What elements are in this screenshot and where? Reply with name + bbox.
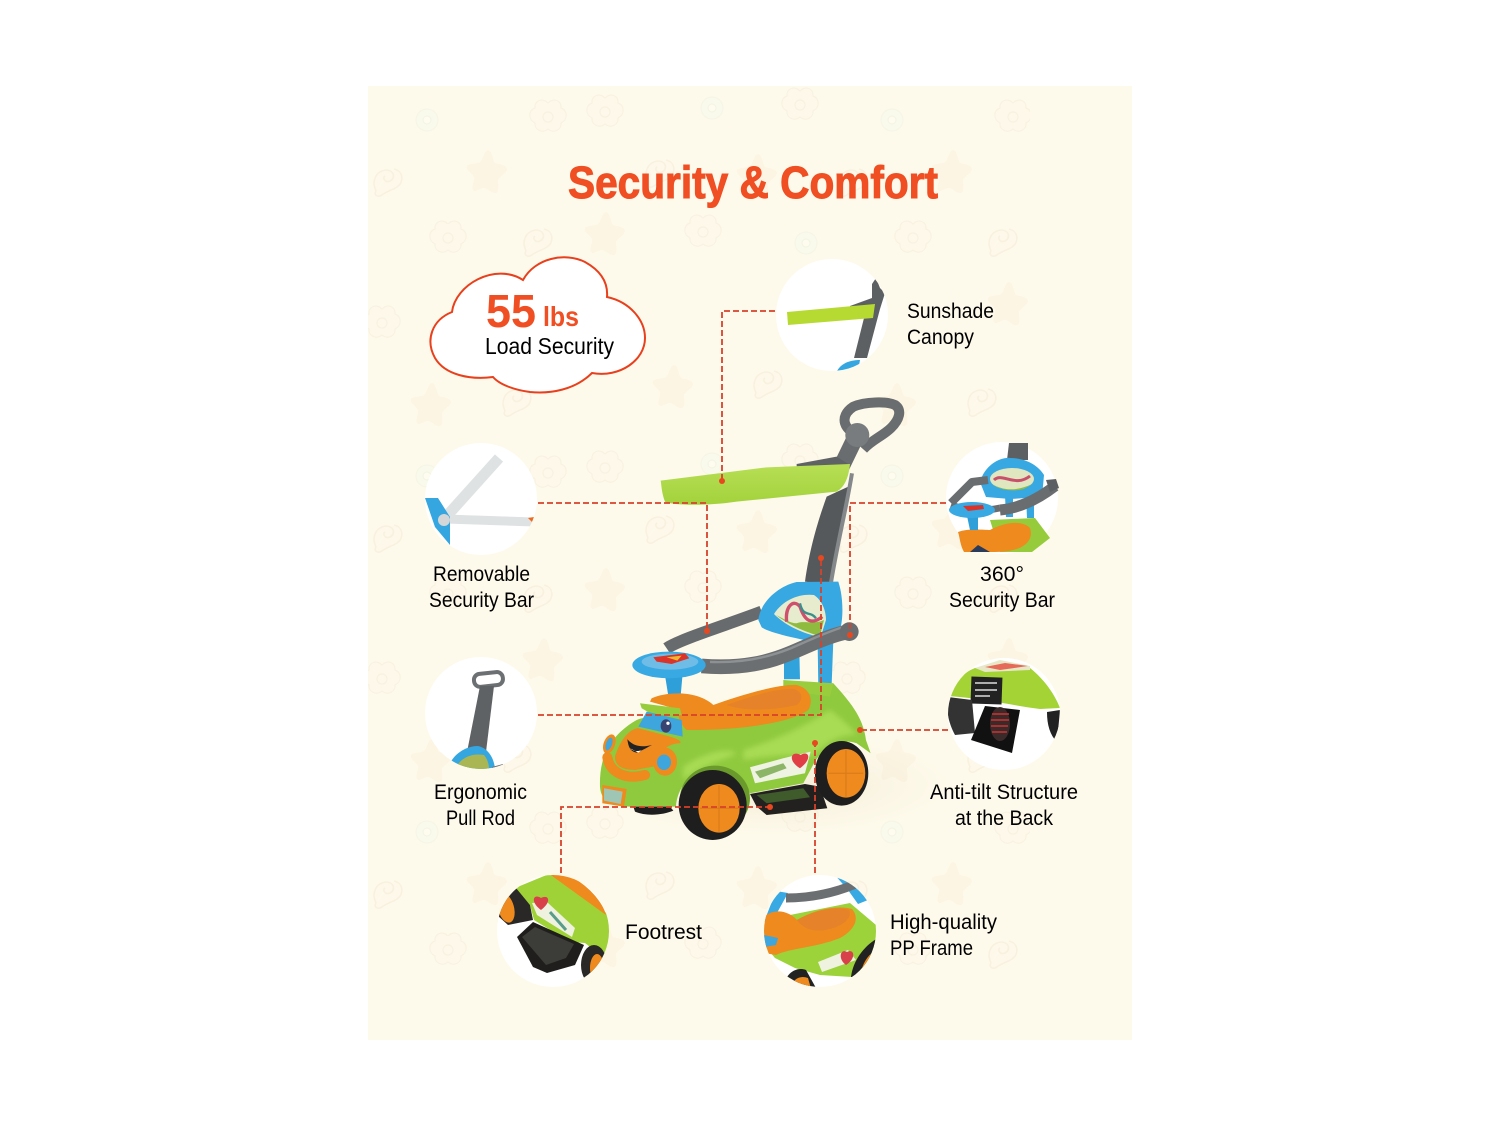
feature: ergonomic pull rod: Pull Rod	[446, 807, 515, 830]
front wheel	[679, 766, 750, 840]
feature: 360 security bar: 360°	[980, 563, 1024, 586]
feature: anti-tilt structure: Anti-tilt Structure	[930, 781, 1078, 804]
side sticker with heart	[750, 752, 811, 783]
feature: sunshade canopy: Canopy	[907, 326, 974, 349]
product: ride-on car with canopy	[600, 402, 899, 840]
feature: high-quality PP frame	[764, 874, 997, 992]
handle	[797, 402, 899, 470]
feature: removable security bar	[425, 443, 537, 612]
front safety arm	[702, 622, 859, 667]
feature: footrest	[494, 874, 702, 987]
body highlights	[683, 710, 857, 780]
connector: sunshade canopy	[719, 311, 775, 484]
feature: sunshade canopy: Sunshade	[907, 300, 994, 323]
cloud callout: 55 lbs load security: 55	[486, 285, 536, 337]
steering column and wheel	[632, 652, 706, 696]
orange seat	[650, 680, 833, 730]
faint floor shadow	[590, 735, 950, 835]
rear wheel	[815, 741, 868, 806]
feature: ergonomic pull rod: Ergonomic	[434, 781, 527, 804]
footboard	[750, 784, 827, 815]
orange face	[601, 728, 681, 777]
connector: removable security bar	[538, 503, 710, 634]
blue back panel	[758, 582, 842, 685]
connector: footrest	[561, 804, 773, 873]
canopy	[661, 464, 850, 505]
feature: removable security bar: Security Bar	[429, 589, 534, 612]
feature: sunshade canopy	[776, 259, 994, 371]
title: Security & Comfort	[568, 157, 938, 208]
feature: ergonomic pull rod	[425, 657, 537, 830]
feature: 360 security bar	[946, 442, 1059, 612]
feature: anti-tilt structure	[930, 658, 1078, 830]
feature: anti-tilt structure: at the Back	[955, 807, 1053, 830]
panel: cream background	[368, 86, 1132, 1040]
connector: anti-tilt structure	[857, 727, 948, 733]
connector: ergonomic pull rod	[538, 555, 824, 715]
cloud callout: 55 lbs load security: Load Security	[485, 333, 614, 359]
feature: footrest: Footrest	[625, 921, 702, 944]
feature: high-quality PP frame: High-quality	[890, 911, 997, 934]
license plate	[602, 785, 627, 807]
feature: high-quality PP frame: PP Frame	[890, 937, 973, 960]
connector: 360 security bar	[847, 503, 946, 638]
cloud callout: 55 lbs load security	[430, 257, 645, 392]
feature: removable security bar: Removable	[433, 563, 530, 586]
feature: 360 security bar: Security Bar	[949, 589, 1055, 612]
pole	[805, 473, 853, 585]
visor and windshield eyes	[638, 703, 683, 737]
back safety arm	[667, 612, 762, 648]
body skirt under nose	[633, 807, 673, 815]
cloud callout: 55 lbs load security: lbs	[543, 301, 579, 332]
car body	[600, 683, 871, 807]
connector: PP frame	[812, 740, 818, 873]
